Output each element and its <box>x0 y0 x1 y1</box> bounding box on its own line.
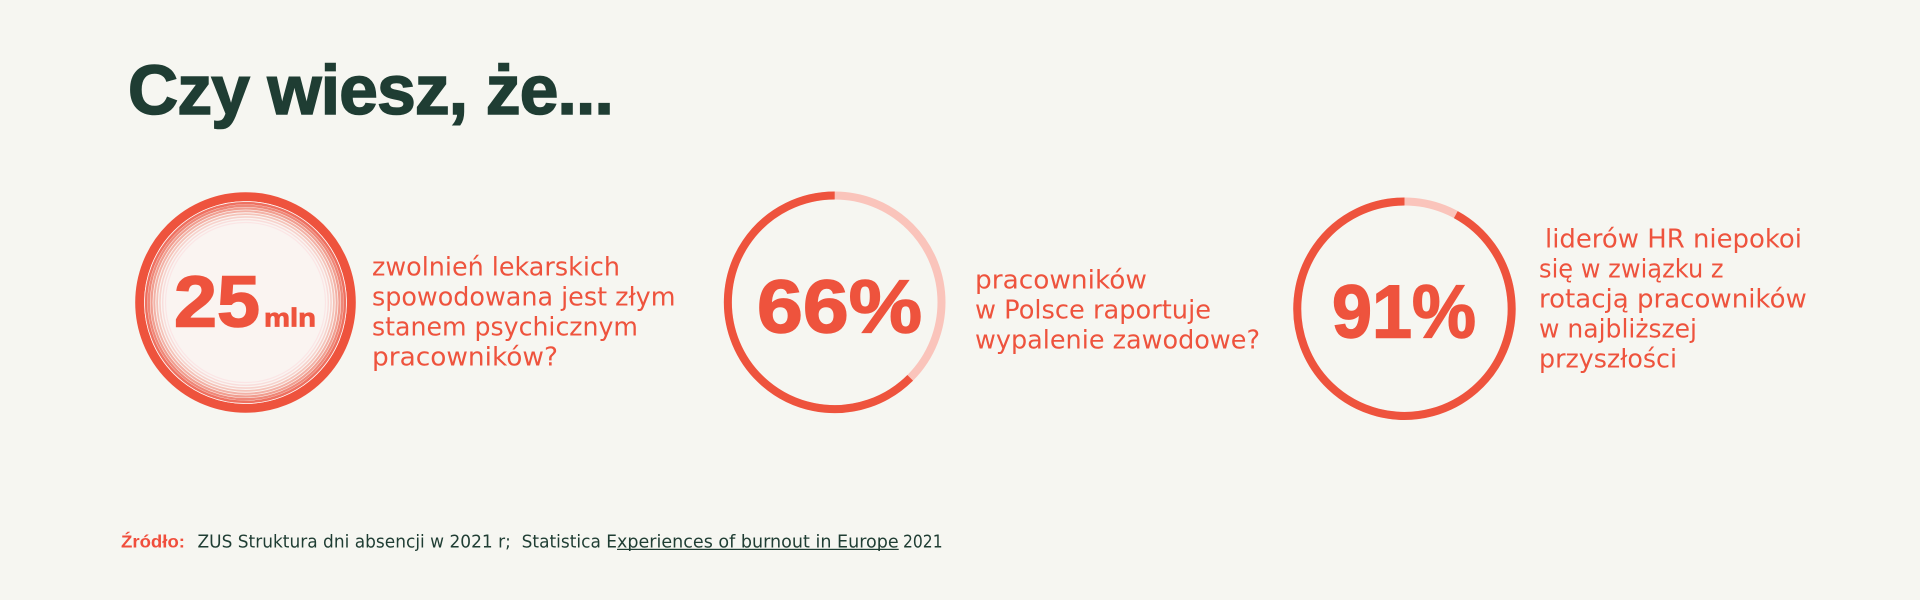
description 1: spowodowana jest złym <box>372 283 676 313</box>
description 3: rotacją pracowników <box>1539 285 1807 315</box>
panel: 66% <box>728 195 1260 409</box>
source link: xperiences of burnout in Europe <box>617 533 899 553</box>
description 3: w najbliższej <box>1539 315 1697 345</box>
description 2: w Polsce raportuje <box>975 295 1211 325</box>
panel: 25 mln <box>140 197 675 408</box>
description 1: pracowników? <box>372 343 558 373</box>
unit: mln: mln <box>264 303 316 333</box>
description 2: wypalenie zawodowe? <box>975 325 1260 355</box>
title: Czy wiesz, że... <box>128 51 613 129</box>
description 3: liderów HR niepokoi <box>1545 225 1802 255</box>
description 3: się w związku z <box>1539 255 1724 285</box>
description 3 <box>1539 225 1807 375</box>
source line <box>121 531 943 553</box>
source label: Źródło: <box>121 531 185 552</box>
description 1: zwolnień lekarskich <box>372 253 620 283</box>
chart: concentric rings <box>140 197 351 408</box>
source year: 2021 <box>903 533 943 553</box>
chart: ring 91% <box>1297 202 1512 416</box>
description 2 <box>975 265 1260 355</box>
description 3: przyszłości <box>1539 345 1677 375</box>
description 2: pracowników <box>975 265 1147 295</box>
number: 91%: 91% <box>1332 269 1476 353</box>
description 1: stanem psychicznym <box>372 313 638 343</box>
description 1 <box>372 253 676 373</box>
chart: ring 66% <box>728 195 942 409</box>
number: 25 mln: 25 <box>174 263 260 343</box>
source text: ZUS Struktura dni absencji w 2021 r; Statistica E <box>198 533 617 553</box>
panel: 91% <box>1297 202 1807 416</box>
number: 66%: 66% <box>757 264 922 348</box>
